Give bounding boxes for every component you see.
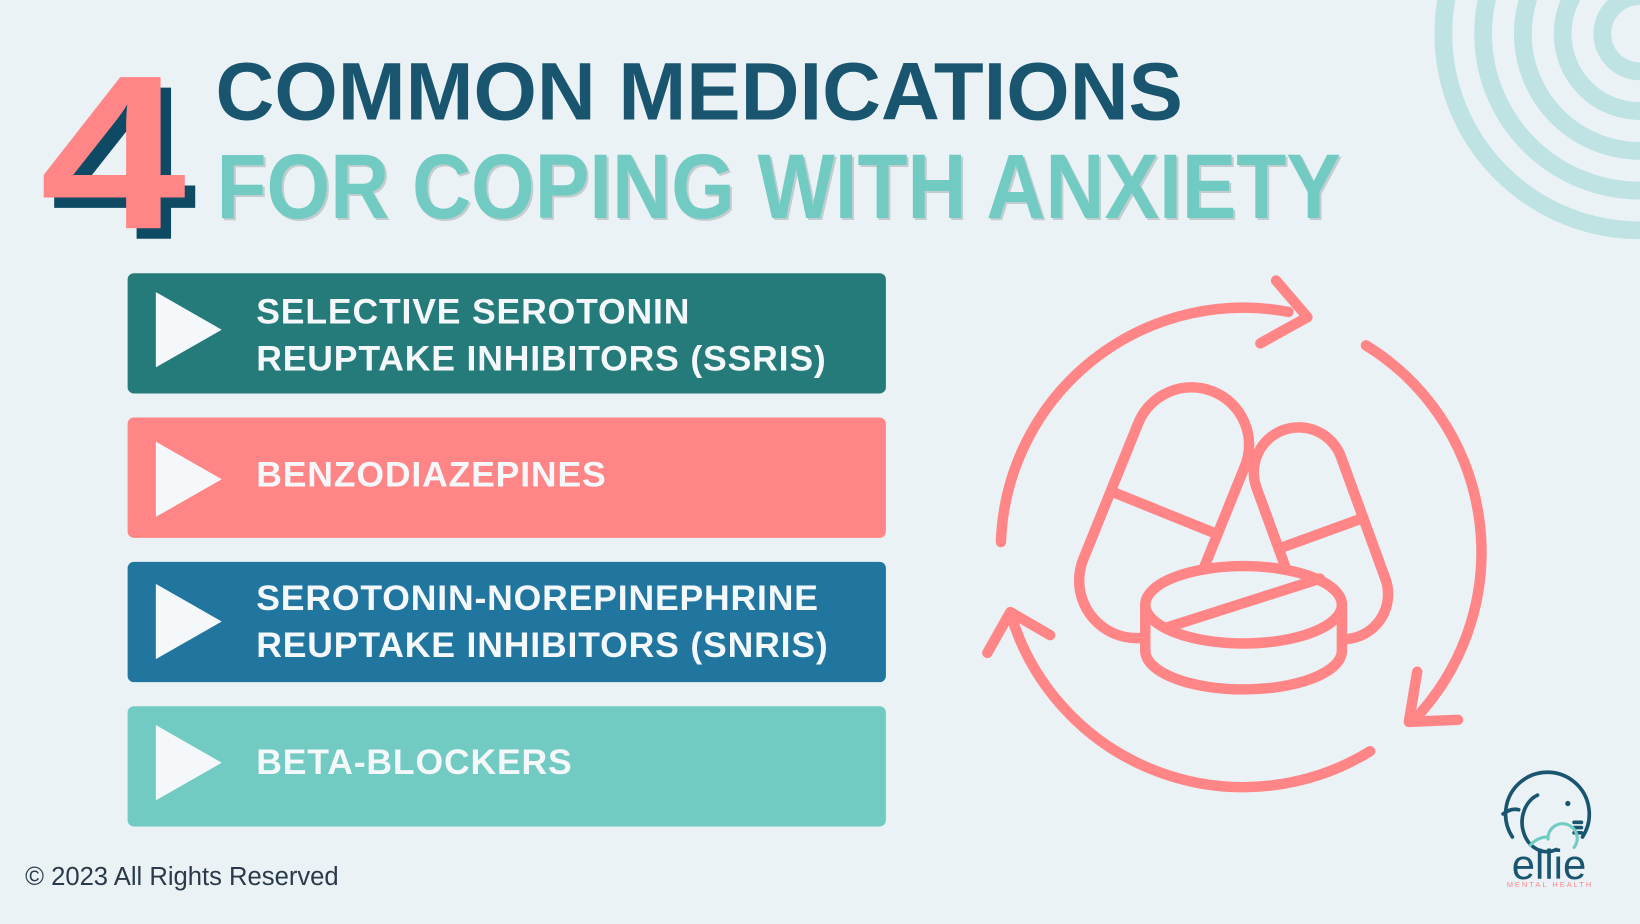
bar 4: Beta-blockers: BETA-BLOCKERS [256, 742, 573, 782]
logo: ellie mental health: MENTAL HEALTH [1507, 880, 1593, 889]
icon: pills with cycle arrows [987, 281, 1481, 787]
bar 3: SNRIs: REUPTAKE INHIBITORS (SNRIS) [256, 625, 829, 665]
title: FOR COPING WITH ANXIETY [219, 137, 1343, 240]
title: COMMON MEDICATIONS [215, 46, 1183, 137]
bar 1: SSRIs: SELECTIVE SEROTONIN [256, 291, 690, 331]
copyright: © 2023 All Rights Reserved [25, 863, 339, 891]
bar 3: SNRIs [128, 562, 886, 682]
decorative rings top right [1443, 0, 1640, 230]
big number 4: 4 [40, 29, 186, 275]
big number 4: 4 [50, 40, 197, 286]
title: FOR COPING WITH ANXIETY [217, 135, 1341, 238]
bar 2: Benzodiazepines: BENZODIAZEPINES [256, 455, 607, 495]
logo: ellie mental health [1503, 772, 1593, 889]
bar 2: Benzodiazepines [128, 418, 886, 538]
bar 1: SSRIs: REUPTAKE INHIBITORS (SSRIS) [256, 338, 827, 378]
bar 3: SNRIs: SEROTONIN-NOREPINEPHRINE [256, 578, 819, 618]
bar 1: SSRIs [128, 273, 886, 393]
logo: ellie mental health: ellie [1512, 841, 1586, 888]
bar 4: Beta-blockers [128, 706, 886, 827]
title [215, 46, 1343, 240]
